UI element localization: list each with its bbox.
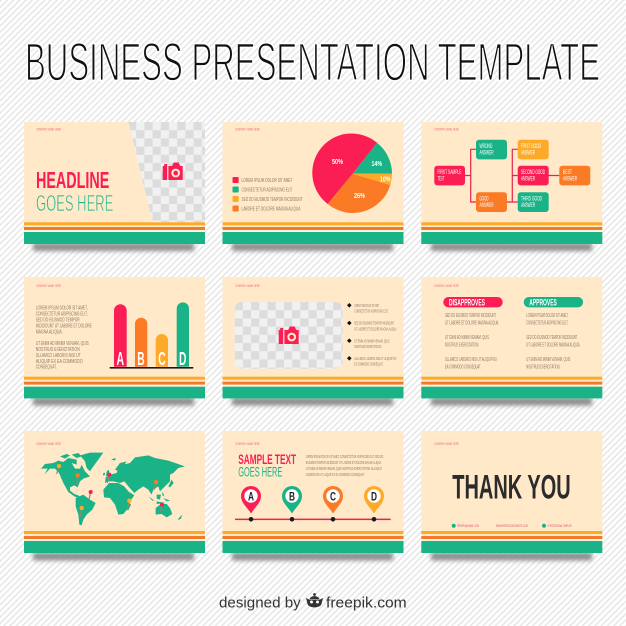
box: best answer: ANSWER bbox=[563, 176, 577, 182]
text: disapproves list: NOSTRUD EXERCITATION. bbox=[445, 342, 479, 348]
photo placeholder bbox=[128, 122, 205, 222]
box: first sample text: FIRST SAMPLE bbox=[438, 169, 462, 176]
panel: bar chart slide bbox=[24, 277, 205, 406]
text block bbox=[36, 306, 92, 371]
text block: SED DO EIUSMOD TEMPOR bbox=[36, 318, 80, 324]
bullet list: NOSTRUD EXERCITATION bbox=[354, 344, 381, 349]
pin A: A bbox=[248, 489, 254, 503]
text: disapproves list: ULLAMCO LABORIS NISI UT ALIQUIP EX bbox=[445, 357, 497, 363]
legend: CONSECTETUR ADIPISCING ELIT bbox=[242, 188, 293, 194]
icon: camera bbox=[279, 326, 299, 344]
bullet list: CONSECTETUR ADIPISCING ELIT, bbox=[354, 309, 388, 314]
box: third good answer: ANSWER bbox=[521, 202, 535, 209]
text block: CONSEQUAT. bbox=[36, 365, 57, 371]
photo placeholder bbox=[235, 302, 343, 369]
pie chart bbox=[312, 133, 392, 213]
paragraph: LOREM IPSUM DOLOR SIT AMET, CONSECTETUR ADIPISCING ELIT, SED DO bbox=[306, 454, 384, 459]
box: wrong answer: ANSWER bbox=[480, 150, 494, 156]
box: first good answer: ANSWER bbox=[521, 150, 535, 156]
panel: thank you slide: COMPANY NAME HERE bbox=[434, 442, 459, 446]
pie chart: 26% bbox=[354, 191, 365, 200]
pie chart: 50% bbox=[332, 157, 343, 166]
bar chart: D bbox=[179, 349, 186, 369]
box: wrong answer bbox=[476, 140, 507, 159]
panel: flow chart slide: COMPANY NAME HERE bbox=[434, 128, 459, 132]
text: approves list: NOSTRUD EXERCITATION. bbox=[526, 364, 560, 370]
panel: world map slide: COMPANY NAME HERE bbox=[36, 442, 61, 446]
pin C bbox=[323, 486, 343, 514]
pin B bbox=[282, 486, 302, 514]
pin B: B bbox=[289, 489, 295, 503]
panel: headline slide: COMPANY NAME HERE bbox=[36, 128, 61, 132]
text block: NOSTRUD EXERCITATION bbox=[36, 347, 80, 353]
pie chart: 10% bbox=[380, 174, 391, 184]
pill: disapproves: DISAPPROVES bbox=[449, 298, 485, 308]
text block: ALIQUIP EX EA COMMODO bbox=[36, 359, 83, 365]
paragraph: LABORIS NISI UT ALIQUIP EX EA COMMODO CONSEQUAT. bbox=[306, 472, 365, 477]
panel: timeline slide bbox=[222, 431, 404, 560]
text block: ULLAMCO LABORIS NISI UT bbox=[36, 353, 81, 359]
box: good answer: GOOD bbox=[480, 196, 489, 202]
text block: CONSECTETUR ADIPISCING ELIT, bbox=[36, 312, 88, 318]
pin C: C bbox=[330, 489, 336, 503]
paragraph: EIUSMOD TEMPOR INCIDIDUNT UT LABORE ET DOLORE MAGNA ALIQUA. bbox=[306, 460, 382, 465]
legend: SED DO EIUSMOD TEMPOR INCIDIDUNT bbox=[242, 197, 303, 203]
legend: LABORE ET DOLORE MAGNA ALIQUA bbox=[242, 207, 301, 213]
heading: headline: HEADLINE bbox=[36, 167, 109, 193]
panel: approves and disapproves slide bbox=[421, 277, 602, 406]
paragraph: UT ENIM AD MINIM VENIAM, QUIS NOSTRUD EXERCITATION ULLAMCO bbox=[306, 466, 382, 471]
text: approves list: UT ENIM AD MINIM VENIAM, QUIS bbox=[526, 357, 571, 363]
box: good answer bbox=[476, 192, 507, 212]
connectors bbox=[465, 149, 559, 202]
icon: camera bbox=[163, 162, 183, 180]
box: first sample text bbox=[434, 166, 465, 185]
footer credit bbox=[219, 593, 407, 612]
panel: world map slide bbox=[24, 431, 205, 560]
contact row: FREEPIK@GMAIL.COM bbox=[457, 524, 479, 528]
box: third good answer bbox=[518, 192, 549, 212]
box: good answer: ANSWER bbox=[480, 202, 494, 209]
pin D: D bbox=[371, 489, 377, 503]
text: disapproves list: UT ENIM AD MINIM VENIAM, QUIS bbox=[445, 335, 489, 341]
panel: pie chart slide: COMPANY NAME HERE bbox=[235, 128, 260, 132]
pin D bbox=[364, 486, 384, 514]
heading: goes here: GOES HERE bbox=[36, 190, 113, 216]
world map bbox=[41, 453, 185, 525]
panel: pie chart slide bbox=[222, 122, 404, 251]
text: approves list bbox=[526, 313, 580, 370]
pie chart: 14% bbox=[372, 159, 382, 168]
heading: sample text: SAMPLE TEXT bbox=[238, 451, 296, 467]
map pins bbox=[57, 464, 164, 517]
box: third good answer: THIRD GOOD bbox=[521, 196, 542, 202]
bullet list: ULLAMCO LABORIS NISI UT ALIQUIP EX bbox=[354, 356, 396, 361]
heading: goes here: GOES HERE bbox=[238, 464, 282, 480]
footer credit: freepik.com bbox=[326, 596, 407, 612]
text: disapproves list: SED DO EIUSMOD TEMPOR INCIDIDUNT bbox=[445, 313, 496, 319]
panel: timeline slide: COMPANY NAME HERE bbox=[235, 442, 260, 446]
contact row bbox=[452, 524, 572, 528]
panel: thank you slide bbox=[421, 431, 602, 560]
legend: LOREM IPSUM DOLOR SIT AMET bbox=[242, 178, 293, 184]
legend bbox=[232, 177, 303, 213]
box: best answer bbox=[559, 166, 590, 185]
box: second good answer: SECOND GOOD bbox=[521, 169, 545, 176]
panel: headline slide bbox=[24, 122, 205, 251]
panel: bar chart slide: COMPANY NAME HERE bbox=[36, 284, 61, 288]
box: best answer: BEST bbox=[563, 169, 572, 176]
pill: approves: APPROVES bbox=[529, 298, 557, 308]
text: disapproves list: UT LABORE ET DOLORE MAGNA ALIQUA. bbox=[445, 320, 499, 326]
box: first good answer: FIRST GOOD bbox=[521, 143, 541, 150]
bar chart: C bbox=[158, 349, 166, 369]
contact row: WWW.PRESENTATIONSITE.COM bbox=[496, 524, 528, 528]
bullet list: UT ENIM AD MINIM VENIAM, QUIS bbox=[354, 338, 389, 343]
box: second good answer: ANSWER bbox=[521, 176, 535, 182]
panel: photo and bullets slide: COMPANY NAME HERE bbox=[235, 284, 260, 288]
text: approves list: LOREM IPSUM DOLOR SIT AMET, bbox=[526, 313, 569, 319]
bar chart: B bbox=[137, 349, 145, 369]
timeline bbox=[235, 486, 391, 522]
text block: LOREM IPSUM DOLOR SIT AMET, bbox=[36, 306, 88, 312]
text block: MAGNA ALIQUA. bbox=[36, 330, 63, 336]
bullet list: LOREM IPSUM DOLOR SIT AMET, bbox=[354, 303, 379, 308]
box: second good answer bbox=[518, 166, 549, 185]
panel: thank you slide: +1 PROFESSIONAL TEMPLATE bbox=[547, 524, 572, 528]
bullet list bbox=[347, 303, 397, 367]
text block: UT ENIM AD MINIM VENIAM, QUIS bbox=[36, 341, 89, 347]
text: approves list: CONSECTETUR ADIPISCING ELIT. bbox=[526, 320, 568, 326]
box: first sample text: TEXT bbox=[438, 176, 445, 182]
footer credit: designed by bbox=[219, 596, 301, 612]
panel: photo and bullets slide bbox=[222, 277, 404, 406]
bullet list: SED DO EIUSMOD TEMPOR INCIDIDUNT bbox=[354, 321, 395, 326]
text block: INCIDIDUNT UT LABORE ET DOLORE bbox=[36, 324, 92, 330]
icon: freepik logo bbox=[306, 593, 323, 607]
text: disapproves list: EA COMMODO CONSEQUAT. bbox=[445, 364, 481, 370]
bar chart bbox=[110, 302, 193, 369]
paragraph bbox=[306, 454, 384, 477]
box: wrong answer: WRONG bbox=[480, 143, 493, 150]
panel: approves and disapproves slide: COMPANY NAME HERE bbox=[434, 284, 459, 288]
bullet list: EA COMMODO CONSEQUAT. bbox=[354, 362, 383, 367]
box: first good answer bbox=[518, 140, 549, 159]
pin A bbox=[241, 486, 261, 514]
text: disapproves list bbox=[445, 313, 499, 370]
bar chart: A bbox=[116, 349, 124, 369]
bullet list: UT LABORE ET DOLORE MAGNA ALIQUA. bbox=[354, 326, 397, 332]
panel: flow chart slide bbox=[421, 122, 602, 251]
